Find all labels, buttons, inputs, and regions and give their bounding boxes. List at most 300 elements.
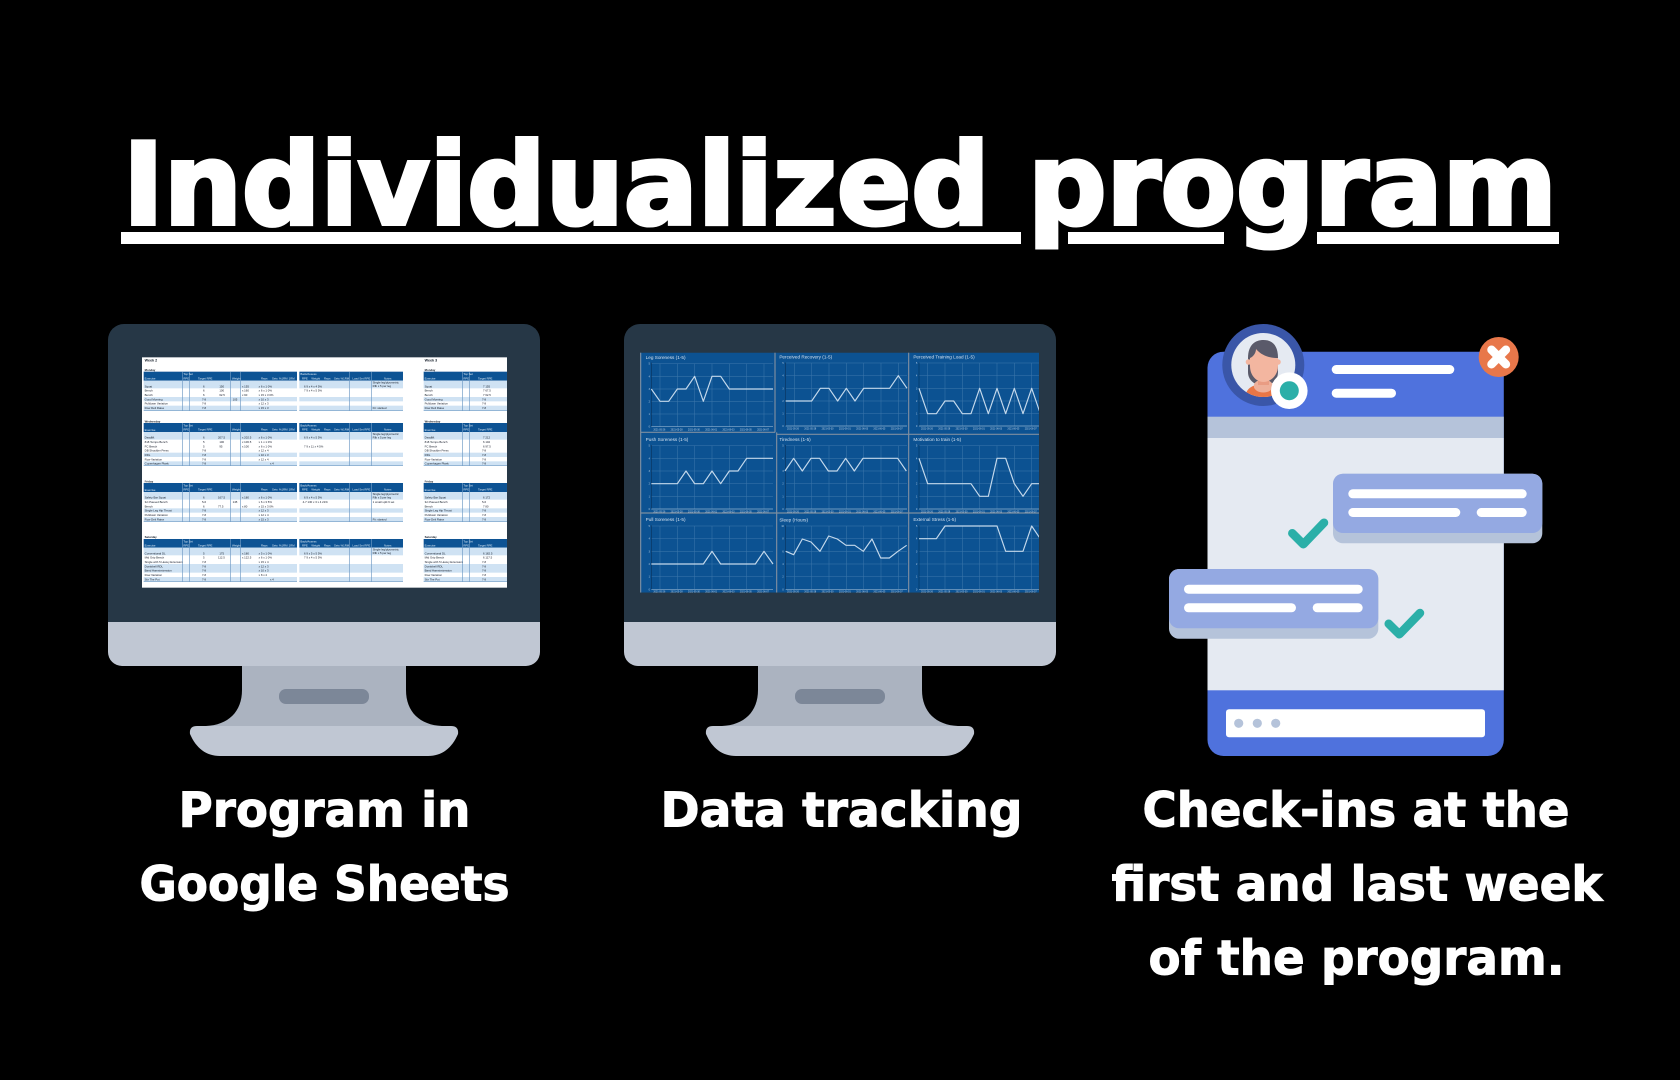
dashboard screen: 3 [916, 471, 918, 473]
spreadsheet screen: DB Shoulder Press [145, 449, 169, 453]
spreadsheet screen: 100 [219, 389, 224, 393]
spreadsheet screen: 7 9 x 11 x 4 5% [304, 444, 324, 448]
spreadsheet screen: x 12 x 4 [259, 457, 269, 461]
spreadsheet screen: 1RM [289, 488, 295, 492]
dashboard screen: 0 [916, 426, 918, 428]
spreadsheet screen: 4-7 130 x 3 x 4 21% [303, 500, 328, 504]
spreadsheet screen: %1RM [279, 376, 288, 380]
spreadsheet screen: x 12 x 3 [259, 564, 269, 568]
spreadsheet screen: Notes [384, 428, 392, 432]
spreadsheet screen: 6 [203, 436, 205, 440]
spreadsheet screen: Notes [384, 543, 392, 547]
spreadsheet screen: 7-8 [482, 569, 487, 573]
dashboard screen: 1 [916, 496, 918, 498]
spreadsheet screen: x 10 x 3 [259, 397, 269, 401]
spreadsheet screen: Top Set [183, 539, 193, 543]
spreadsheet screen: 7-8 [202, 457, 207, 461]
spreadsheet screen: Sets [272, 543, 278, 547]
spreadsheet screen: x 100 [242, 444, 249, 448]
spreadsheet screen: Exercise [145, 428, 156, 432]
dashboard screen: Push Soreness (1-5) [646, 437, 689, 442]
caption: data tracking: Data tracking [660, 782, 1022, 838]
spreadsheet screen: Pulldown Variation [145, 513, 168, 517]
spreadsheet screen: Reps [261, 488, 268, 492]
spreadsheet screen: x 180 [242, 551, 249, 555]
spreadsheet screen: 6 [203, 393, 205, 397]
spreadsheet screen: Target RPE [198, 376, 213, 380]
spreadsheet screen: 6 [203, 389, 205, 393]
spreadsheet screen: 5 [203, 444, 205, 448]
saturday text: Saturday [145, 535, 157, 539]
spreadsheet screen: x 12 x 3 [259, 509, 269, 513]
spreadsheet screen: Conventional DL [425, 551, 446, 555]
spreadsheet screen: RPE [183, 543, 189, 547]
spreadsheet screen: 207.5 [218, 436, 226, 440]
spreadsheet screen: Sets [272, 376, 278, 380]
spreadsheet screen: 6 182.5 [483, 551, 493, 555]
spreadsheet screen: 7 9 x 4 x 5 5% [304, 556, 322, 560]
spreadsheet screen: RIb x 5 per leg [373, 384, 391, 388]
spreadsheet screen: Single leg/plyometric [373, 492, 399, 496]
dashboard screen: 5 [649, 526, 651, 528]
chat bubble: upper [1333, 474, 1542, 543]
spreadsheet screen: x 15 x 3 0% [259, 504, 274, 508]
monitor slot [279, 689, 369, 704]
spreadsheet screen: 7 67.5 [483, 389, 491, 393]
spreadsheet screen: Sets [272, 488, 278, 492]
monitor base [108, 622, 540, 666]
spreadsheet screen: 7-8 [482, 564, 487, 568]
dashboard screen: 3 [649, 471, 651, 473]
spreadsheet screen: Deadlift [425, 436, 434, 440]
spreadsheet screen: Squat [145, 384, 152, 388]
spreadsheet screen: 7 62.5 [483, 393, 491, 397]
spreadsheet screen: Weight [232, 488, 241, 492]
spreadsheet screen: Bench [425, 504, 433, 508]
chart lines [651, 376, 1039, 564]
spreadsheet screen: 3ct Paused Bench [145, 500, 168, 504]
spreadsheet screen: Row Delt Raise [425, 517, 445, 521]
spreadsheet screen: %1RM [341, 543, 350, 547]
spreadsheet screen: Reps [261, 376, 268, 380]
dashboard screen: 2 [649, 484, 651, 486]
caption: check-ins: first and last week [1112, 856, 1604, 912]
spreadsheet screen: 7-8 [202, 517, 207, 521]
spreadsheet screen: 62.5 [219, 393, 225, 397]
spreadsheet screen: Pulldown Variation [425, 513, 448, 517]
spreadsheet screen: Pulldown Variation [145, 402, 168, 406]
spreadsheet screen: Single with 5 Heavy Extension [145, 560, 183, 564]
spreadsheet screen: Notes [384, 376, 392, 380]
spreadsheet screen: Single Leg Hip Thrust [425, 509, 452, 513]
spreadsheet screen: Friday [425, 479, 434, 483]
spreadsheet screen: Exercise [145, 377, 156, 381]
dashboard screen: 4 [782, 458, 784, 460]
spreadsheet screen: 77.5 [218, 504, 224, 508]
spreadsheet screen: x 160 [242, 389, 249, 393]
spreadsheet screen: Weight [232, 428, 241, 432]
spreadsheet screen: 6 9 x 4 x 5 5% [304, 496, 322, 500]
dashboard screen: 5 [782, 446, 784, 448]
dashboard screen: 2021-05-26 2021-05-28 2021-05-30 2021-06-01 2021-06-03 2021-06-05 2021-06-07 [787, 592, 903, 594]
spreadsheet screen: 6 9 x 5 x 5 5% [304, 551, 322, 555]
header band [1208, 417, 1504, 438]
panel dividers [641, 353, 1039, 593]
spreadsheet screen: 7-8 [202, 564, 207, 568]
spreadsheet screen: Reps [324, 376, 331, 380]
dashboard screen: 0 [649, 427, 651, 429]
spreadsheet screen: RIb x 5 per leg [373, 435, 391, 439]
spreadsheet screen: Top Set [183, 483, 193, 487]
monitor base [624, 622, 1056, 666]
table fills [144, 372, 507, 548]
spreadsheet screen: Safety Bar Squat [425, 496, 446, 500]
spreadsheet screen: RIb x 5 per leg [373, 495, 391, 499]
spreadsheet screen: Row Delt Raise [425, 406, 445, 410]
spreadsheet screen: 100 [219, 440, 224, 444]
monitor foot [706, 726, 974, 756]
spreadsheet screen: Sets [334, 428, 340, 432]
dashboard screen: 2 [782, 577, 784, 579]
spreadsheet screen: Row Delt Raise [145, 406, 165, 410]
spreadsheet screen: Top Set [463, 372, 473, 376]
spreadsheet screen: Bench [145, 504, 153, 508]
spreadsheet screen: Back/Assess [300, 372, 317, 376]
dashboard screen: 2 [782, 484, 784, 486]
spreadsheet screen: Bench [145, 393, 153, 397]
icon: avatar [1222, 324, 1304, 406]
spreadsheet screen: 7-8 [482, 402, 487, 406]
dashboard screen: External Stress (1-5) [913, 517, 956, 522]
spreadsheet screen: Dumbbell RDL [425, 564, 443, 568]
spreadsheet screen: 1RM [289, 543, 295, 547]
spreadsheet screen: 7-8 [482, 573, 487, 577]
dashboard screen: 5 [649, 446, 651, 448]
spreadsheet screen: 5 [203, 556, 205, 560]
spreadsheet screen: Target RPE [198, 428, 213, 432]
spreadsheet screen: Back/Assess [300, 483, 317, 487]
dashboard screen: 1 [649, 414, 651, 416]
spreadsheet screen: 7 212 [483, 436, 491, 440]
spreadsheet screen: Top Set [183, 372, 193, 376]
spreadsheet screen: Row Variation [145, 457, 162, 461]
axes [651, 363, 919, 589]
spreadsheet screen: %1RM [341, 488, 350, 492]
spreadsheet screen: 5-6 [482, 500, 487, 504]
spreadsheet screen: 1 small split 6 set [373, 500, 395, 504]
monitor stand [206, 666, 442, 726]
spreadsheet screen: RPE [183, 376, 189, 380]
spreadsheet screen: Sets [272, 428, 278, 432]
spreadsheet screen: x 5 x 1 0% [259, 551, 272, 555]
spreadsheet screen: RIb x 5 per leg [373, 551, 391, 555]
spreadsheet screen: RPE [183, 428, 189, 432]
spreadsheet screen: Fit: slanted [373, 406, 387, 410]
spreadsheet screen: x 1 x 1 0% [259, 440, 272, 444]
spreadsheet screen: Mid Grip Bench [425, 556, 445, 560]
spreadsheet screen: 5-6 [202, 500, 207, 504]
spreadsheet screen: Load Set RPE [352, 428, 370, 432]
spreadsheet screen: Reps [261, 543, 268, 547]
icon: upper check mark [1292, 523, 1324, 544]
chat bubble: lower [1169, 569, 1378, 639]
spreadsheet screen: Dumbbell RDL [145, 564, 163, 568]
caption: program [140, 782, 510, 912]
spreadsheet screen: 7-8 [482, 462, 487, 466]
spreadsheet screen: RPE [463, 488, 469, 492]
dashboard screen: 2021-05-26 2021-05-28 2021-05-30 2021-06-01 2021-06-03 2021-06-05 2021-06-07 [787, 429, 903, 431]
spreadsheet screen: 6 [203, 384, 205, 388]
dashboard screen: Pull Soreness (1-5) [646, 517, 686, 522]
spreadsheet screen: Week 2 [145, 359, 157, 363]
header text lines [1332, 365, 1454, 398]
chat body [1208, 438, 1504, 690]
spreadsheet screen: Sets [334, 376, 340, 380]
dashboard screen: Perceived Training Load (1-5) [913, 354, 975, 359]
spreadsheet screen: x 15 x 3 [259, 517, 269, 521]
dashboard screen: 3 [649, 389, 651, 391]
spreadsheet screen: Bench [425, 393, 433, 397]
spreadsheet screen: 818 Tempo Bench [425, 440, 448, 444]
spreadsheet screen: Sets [334, 543, 340, 547]
dashboard screen: 2 [649, 564, 651, 566]
dashboard screen: Tiredness (1-5) [779, 437, 811, 442]
spreadsheet screen: Single leg/plyometric [373, 548, 399, 552]
spreadsheet screen: x 122.5 [242, 556, 252, 560]
icon: online status [1271, 372, 1308, 409]
spreadsheet screen: Row Variation [425, 457, 442, 461]
spreadsheet screen: %1RM [279, 488, 288, 492]
spreadsheet screen: 7-8 [202, 573, 207, 577]
spreadsheet screen: Weight [232, 376, 241, 380]
spreadsheet screen: Back/Assess [300, 539, 317, 543]
spreadsheet screen: 7-8 [202, 406, 207, 410]
spreadsheet screen: RPE [183, 488, 189, 492]
spreadsheet screen: 150 [219, 384, 224, 388]
spreadsheet screen: Conventional DL [145, 551, 166, 555]
spreadsheet screen: Deadlift [145, 436, 154, 440]
spreadsheet screen: Top Set [463, 423, 473, 427]
spreadsheet screen: x 15 x 3 [259, 406, 269, 410]
dashboard screen: 3 [782, 388, 784, 390]
spreadsheet screen: x 8 x 4 [259, 573, 267, 577]
spreadsheet screen: Row Variation [425, 573, 442, 577]
spreadsheet screen: 7-8 [202, 513, 207, 517]
dashboard screen: 3 [782, 471, 784, 473]
spreadsheet screen: Saturday [425, 535, 437, 539]
spreadsheet screen: 7-8 [482, 406, 487, 410]
spreadsheet screen: x 6 x 1 0% [259, 556, 272, 560]
spreadsheet screen: Single Leg Hip Thrust [145, 509, 172, 513]
spreadsheet screen: Reps [324, 543, 331, 547]
spreadsheet screen: 175 [219, 551, 224, 555]
spreadsheet screen: Weight [232, 543, 241, 547]
dashboard screen: 4 [916, 458, 918, 460]
spreadsheet screen: Reps [324, 428, 331, 432]
spreadsheet screen: 6 97.5 [483, 444, 491, 448]
spreadsheet screen: Squat [425, 384, 432, 388]
spreadsheet screen: Bench [145, 389, 153, 393]
spreadsheet screen: Band Hamstrstension [425, 569, 452, 573]
spreadsheet screen: Target RPE [478, 488, 493, 492]
spreadsheet screen: 1RM [289, 428, 295, 432]
spreadsheet screen: Load Set RPE [352, 488, 370, 492]
spreadsheet screen: 7 9 x 4 x 5 5% [304, 389, 322, 393]
dashboard screen: 4 [649, 458, 651, 460]
spreadsheet screen: x 4 [270, 462, 274, 466]
spreadsheet screen: 818 Tempo Bench [145, 440, 168, 444]
spreadsheet screen: %1RM [279, 428, 288, 432]
dashboard screen: 0 [782, 509, 784, 511]
spreadsheet screen: 7-8 [482, 513, 487, 517]
spreadsheet screen: x 6 x 1 0% [259, 444, 272, 448]
dashboard screen: 3 [916, 388, 918, 390]
spreadsheet screen: 7-8 [482, 560, 487, 564]
spreadsheet screen: Fit: slanted [373, 517, 387, 521]
spreadsheet screen: %1RM [341, 376, 350, 380]
spreadsheet screen: RPE [463, 428, 469, 432]
spreadsheet screen: Bench [425, 389, 433, 393]
spreadsheet screen: Band Hamstrstension [145, 569, 172, 573]
dashboard screen: 0 [916, 589, 918, 591]
spreadsheet screen: x 15 x 3 0% [259, 393, 274, 397]
dashboard screen: 2021-05-26 2021-05-28 2021-05-30 2021-06-01 2021-06-03 2021-06-05 2021-06-07 [787, 512, 903, 514]
spreadsheet screen: Back/Assess [300, 423, 317, 427]
spreadsheet screen: x 106.5 [242, 440, 252, 444]
spreadsheet screen: 7-8 [482, 457, 487, 461]
spreadsheet screen: 5 [203, 440, 205, 444]
caption: check-ins: Check-ins at the [1142, 782, 1570, 838]
spreadsheet screen: RPE [463, 376, 469, 380]
panel: program monitor [108, 324, 540, 756]
window frame [1208, 352, 1504, 756]
spreadsheet screen: 3ct Paused Bench [425, 500, 448, 504]
monitor foot [190, 726, 458, 756]
spreadsheet screen: Top Set [463, 483, 473, 487]
spreadsheet screen: Wednesday [425, 419, 441, 423]
dashboard screen: Perceived Recovery (1-5) [779, 354, 833, 359]
dashboard screen: 1 [916, 577, 918, 579]
caption: program: Program in [178, 782, 470, 838]
spreadsheet screen: x 12 x 4 [259, 513, 269, 517]
spreadsheet screen: x 10 x 3 [259, 569, 269, 573]
spreadsheet screen: 7-8 [202, 453, 207, 457]
title: Individualized program [123, 119, 1557, 251]
dashboard screen: 5 [916, 526, 918, 528]
icon: lower check mark [1389, 613, 1420, 634]
spreadsheet screen: 7-8 [202, 560, 207, 564]
dashboard screen: 10 [781, 526, 785, 528]
spreadsheet screen: Exercise [145, 488, 156, 492]
spreadsheet screen: 7-8 [482, 577, 487, 581]
dashboard screen: 5 [916, 446, 918, 448]
spreadsheet screen: x 10 x 3 [259, 453, 269, 457]
dashboard screen: 2021-05-26 2021-05-28 2021-05-30 2021-06-01 2021-06-03 2021-06-05 2021-06-07 [921, 429, 1037, 431]
spreadsheet screen: Safety Bar Squat [145, 496, 166, 500]
spreadsheet screen: 7 155 [483, 384, 491, 388]
caption: check-ins [1112, 782, 1604, 986]
spreadsheet screen: 7-8 [482, 449, 487, 453]
dashboard screen: 6 [782, 551, 784, 553]
spreadsheet screen: Pulldown Variation [425, 402, 448, 406]
dashboard screen [640, 353, 1039, 594]
spreadsheet screen: Top Set [463, 539, 473, 543]
monitor slot [795, 689, 885, 704]
spreadsheet screen: 6 117.5 [483, 556, 493, 560]
date axes: 2021-05-26 2021-05-28 2021-05-30 2021-06-01 2021-06-03 2021-06-05 2021-06-07 [653, 429, 770, 431]
spreadsheet screen: x 180 [242, 496, 249, 500]
spreadsheet screen: 7-8 [482, 509, 487, 513]
spreadsheet screen: Mid Grip Bench [145, 556, 165, 560]
spreadsheet screen: %1RM [279, 543, 288, 547]
grid lines [651, 363, 1039, 589]
spreadsheet screen: Single leg/plyometric [373, 381, 399, 385]
dashboard screen: 2021-05-26 2021-05-28 2021-05-30 2021-06-01 2021-06-03 2021-06-05 2021-06-07 [921, 592, 1037, 594]
spreadsheet screen: Sets [334, 488, 340, 492]
spreadsheet screen: Reps [324, 488, 331, 492]
spreadsheet screen: 145 [233, 500, 238, 504]
spreadsheet screen: x 80 [242, 504, 248, 508]
spreadsheet screen: Copenhagen Plank [145, 462, 169, 466]
spreadsheet screen: Target RPE [198, 488, 213, 492]
spreadsheet screen: Reps [261, 428, 268, 432]
dashboard screen: 1 [916, 414, 918, 416]
spreadsheet screen [142, 357, 507, 588]
dashboard screen: 2 [916, 401, 918, 403]
spreadsheet screen: Load Set RPE [352, 376, 370, 380]
spreadsheet screen: 6 [203, 496, 205, 500]
spreadsheet screen: 7-8 [482, 453, 487, 457]
spreadsheet screen: Weight [311, 543, 320, 547]
dashboard screen: 0 [649, 589, 651, 591]
spreadsheet screen: 7-8 [202, 397, 207, 401]
spreadsheet screen: Notes [384, 488, 392, 492]
dashboard screen: 2 [916, 484, 918, 486]
monday text: Monday [145, 368, 156, 372]
spreadsheet screen: 105 [233, 397, 238, 401]
spreadsheet screen: %1RM [341, 428, 350, 432]
dashboard screen: 2021-05-26 2021-05-28 2021-05-30 2021-06-01 2021-06-03 2021-06-05 2021-06-07 [653, 512, 770, 514]
spreadsheet screen: Good Morning [145, 397, 163, 401]
spreadsheet screen: Weight [311, 376, 320, 380]
spreadsheet screen: 7-8 [482, 397, 487, 401]
spreadsheet screen: 6 9 x 4 x 4 5% [304, 384, 322, 388]
dashboard screen: Sleep (Hours) [779, 518, 809, 523]
spreadsheet screen: Week 3 [425, 359, 437, 363]
dashboard screen: 4 [649, 539, 651, 541]
spreadsheet screen: x 12 x 3 [259, 402, 269, 406]
spreadsheet screen: RPE [302, 376, 308, 380]
dashboard screen: 5 [916, 363, 918, 365]
panel: data tracking monitor [624, 324, 1056, 756]
dashboard screen: 0 [916, 509, 918, 511]
icon: close button [1479, 337, 1519, 377]
spreadsheet screen: 7-8 [202, 462, 207, 466]
spreadsheet screen: 7-8 [202, 569, 207, 573]
dashboard screen: Motivation to train (1-5) [913, 437, 962, 442]
dashboard screen: 4 [649, 376, 651, 378]
spreadsheet screen: Exercise [425, 544, 436, 548]
y ticks: 5 [649, 364, 651, 366]
spreadsheet screen: Exercise [425, 377, 436, 381]
monitor body [624, 324, 1056, 622]
message input [1226, 709, 1485, 737]
spreadsheet screen: 7-8 [202, 449, 207, 453]
spreadsheet screen: 7-8 [202, 577, 207, 581]
dashboard screen: 2 [649, 401, 651, 403]
spreadsheet screen: x 12 x 4 [259, 449, 269, 453]
dashboard screen: 2021-05-26 2021-05-28 2021-05-30 2021-06-01 2021-06-03 2021-06-05 2021-06-07 [653, 592, 770, 594]
